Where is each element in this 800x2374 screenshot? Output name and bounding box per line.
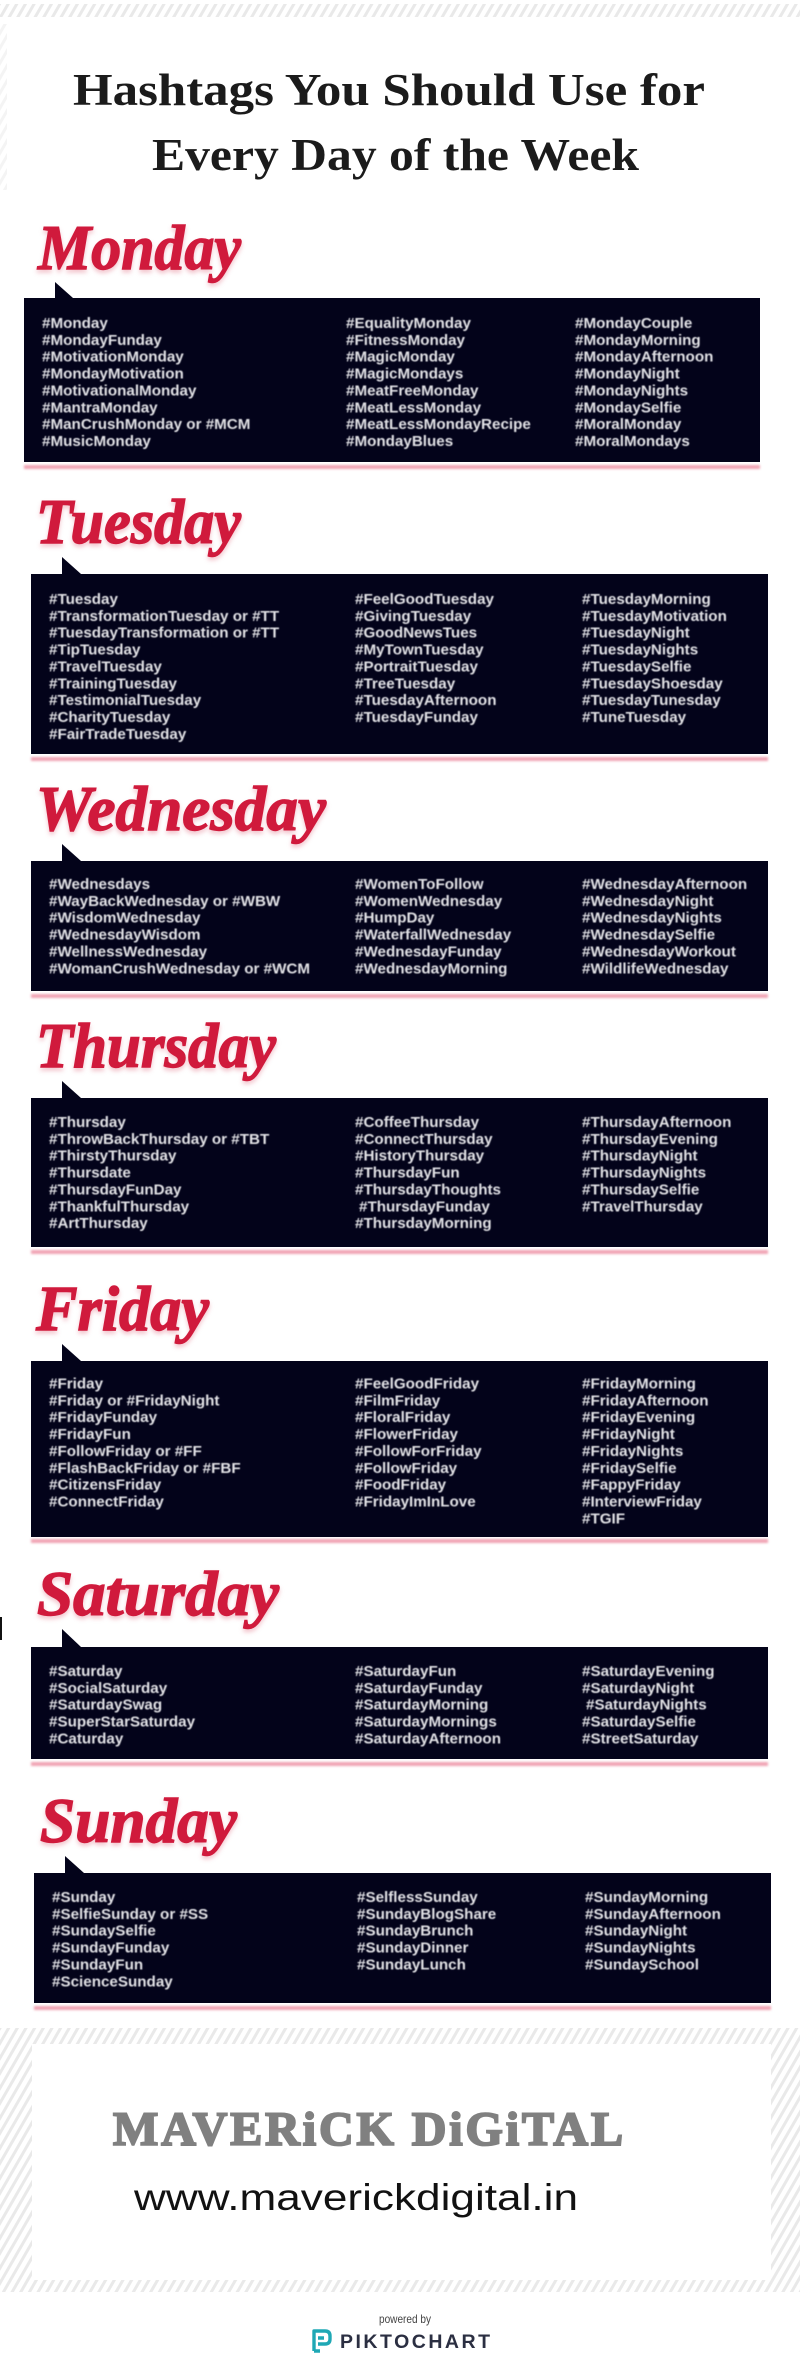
hashtag column 3: Tuesday: #TuneTuesday <box>582 709 687 726</box>
hashtag column 3: Monday: #MoralMonday <box>575 416 682 433</box>
hashtag column 2: Thursday: #ThursdayMorning <box>355 1215 492 1232</box>
hashtag column 3: Monday: #MondaySelfie <box>575 399 681 416</box>
hashtag column 3: Wednesday: #WednesdaySelfie <box>582 927 715 944</box>
hashtag column 1: Thursday: #Thursday <box>49 1114 126 1131</box>
hashtag column 1: Wednesday: #WomanCrushWednesday or #WCM <box>49 960 310 977</box>
hashtag column 2: Saturday: #SaturdayFunday <box>355 1680 483 1697</box>
hashtag column 1: Sunday: #SundaySelfie <box>52 1923 156 1940</box>
hashtag column 1: Thursday: #ArtThursday <box>49 1215 148 1232</box>
pink underline: Wednesday <box>31 994 768 998</box>
speech tail: Thursday <box>62 1081 81 1098</box>
hashtag column 2: Tuesday: #GivingTuesday <box>355 608 472 625</box>
hashtag column 3: Wednesday: #WednesdayNight <box>582 893 713 910</box>
dark box: Wednesday <box>31 861 768 991</box>
hashtag column 2: Monday: #MagicMonday <box>346 349 455 366</box>
hashtag column 3: Monday: #MondayNight <box>575 366 680 383</box>
heading: Friday: Friday <box>35 1273 210 1344</box>
panel: Friday <box>31 1273 768 1543</box>
hashtag column 2: Tuesday: #TuesdayFunday <box>355 709 478 726</box>
hashtag column 2: Friday: #FridayImInLove <box>355 1493 476 1510</box>
hashtag column 3: Friday: #FridayNight <box>582 1426 675 1443</box>
hashtag column 3: Sunday: #SundaySchool <box>585 1956 699 1973</box>
speech tail: Wednesday <box>62 844 81 861</box>
hashtag column 2: Wednesday: #WomenToFollow <box>355 876 484 893</box>
hashtag column 3: Saturday: #SaturdaySelfie <box>582 1714 696 1731</box>
hashtag column 1: Monday: #MusicMonday <box>42 433 151 450</box>
hashtag column 1: Monday: #Monday <box>42 315 108 332</box>
pink underline: Tuesday <box>31 757 768 761</box>
hashtag column 3: Thursday: #ThursdaySelfie <box>582 1181 699 1198</box>
hashtag column 1: Tuesday: #TestimonialTuesday <box>49 692 202 709</box>
hashtag column 3: Saturday: #StreetSaturday <box>582 1730 699 1747</box>
hashtag column 2: Monday: #MagicMondays <box>346 366 463 383</box>
hashtag column 2: Monday: #MeatFreeMonday <box>346 382 479 399</box>
hashtag column 2: Tuesday: #MyTownTuesday <box>355 642 484 659</box>
hashtag column 1: Monday: #MondayMotivation <box>42 366 184 383</box>
heading: Wednesday: Wednesday <box>36 773 327 844</box>
hashtag column 3: Wednesday: #WednesdayAfternoon <box>582 876 747 893</box>
hashtag column 1: Tuesday: #TipTuesday <box>49 642 141 659</box>
heading: Thursday: Thursday <box>36 1010 277 1081</box>
hashtag column 3: Thursday: #ThursdayAfternoon <box>582 1114 731 1131</box>
hashtag column 2: Thursday: #HistoryThursday <box>355 1148 485 1165</box>
hashtag column 2: Friday: #FeelGoodFriday <box>355 1376 480 1392</box>
panel: Saturday <box>31 1558 768 1766</box>
dark box: Monday <box>24 298 760 462</box>
hashtag column 3: Tuesday: #TuesdayNight <box>582 625 690 642</box>
hashtag column 3: Saturday: #SaturdayNight <box>582 1680 694 1697</box>
hashtag column 2: Wednesday: #WaterfallWednesday <box>355 927 512 944</box>
hashtag column 3: Friday: #FridayEvening <box>582 1409 695 1426</box>
dark box: Sunday <box>34 1873 771 2003</box>
hashtag column 1: Saturday: #SuperStarSaturday <box>49 1714 196 1731</box>
hashtag column 3: Tuesday: #TuesdayNights <box>582 642 698 659</box>
hashtag column 2: Monday: #MondayBlues <box>346 433 453 450</box>
hashtag column 1: Friday: #FlashBackFriday or #FBF <box>49 1460 241 1477</box>
powered by label: powered by <box>379 2312 431 2326</box>
hashtag column 1: Friday: #FridayFun <box>49 1426 131 1443</box>
hashtag column 3: Friday: #FridayAfternoon <box>582 1392 709 1409</box>
hashtag column 2: Wednesday: #WednesdayFunday <box>355 943 502 960</box>
hashtag column 3: Tuesday: #TuesdayMorning <box>582 591 711 608</box>
hashtag column 1: Thursday: #Thursdate <box>49 1165 131 1182</box>
hashtag column 2: Wednesday: #HumpDay <box>355 910 435 927</box>
hashtag column 3: Tuesday: #TuesdayMotivation <box>582 608 727 625</box>
hashtag column 1: Thursday: #ThrowBackThursday or #TBT <box>49 1131 270 1148</box>
panel: Monday <box>24 212 760 469</box>
hashtag column 3: Wednesday: #WildlifeWednesday <box>582 960 729 977</box>
dark box: Saturday <box>31 1647 768 1759</box>
hashtag column 1: Tuesday: #TuesdayTransformation or #TT <box>49 625 280 642</box>
hashtag column 1: Thursday: #ThirstyThursday <box>49 1148 177 1165</box>
hashtag column 3: Saturday: #SaturdayEvening <box>582 1663 715 1680</box>
dark box: Tuesday <box>31 574 768 754</box>
piktochart wordmark: PIKTOCHART <box>340 2331 490 2353</box>
hashtag column 1: Sunday: #SundayFun <box>52 1956 143 1973</box>
top hatched band <box>0 4 800 17</box>
hashtag column 3: Friday: #TGIF <box>582 1510 625 1527</box>
hashtag column 1: Sunday: #SelfieSunday or #SS <box>52 1906 208 1923</box>
hashtag column 3: Friday: #FridaySelfie <box>582 1460 677 1477</box>
heading: Sunday: Sunday <box>40 1785 238 1856</box>
hashtag column 3: Monday: #MondayCouple <box>575 315 692 332</box>
hashtag column 1: Tuesday: #CharityTuesday <box>49 709 171 726</box>
pink underline: Monday <box>24 465 760 469</box>
hashtag column 1: Sunday: #ScienceSunday <box>52 1973 173 1990</box>
hashtag column 2: Saturday: #SaturdayAfternoon <box>355 1730 501 1747</box>
heading: Saturday: Saturday <box>37 1558 280 1629</box>
hashtag column 2: Friday: #FlowerFriday <box>355 1426 459 1443</box>
hashtag column 3: Sunday: #SundayNight <box>585 1923 687 1940</box>
hashtag column 2: Wednesday: #WednesdayMorning <box>355 960 507 977</box>
hashtag column 2: Thursday: #ThursdayFun <box>355 1165 460 1182</box>
icon: piktochart logo <box>314 2331 330 2351</box>
hashtag column 2: Thursday: #ThursdayFunday <box>359 1198 490 1215</box>
hashtag column 2: Saturday: #SaturdayMornings <box>355 1714 497 1731</box>
hashtag column 2: Thursday: #ThursdayThoughts <box>355 1181 501 1198</box>
hashtag column 3: Tuesday: #TuesdayTunesday <box>582 692 721 709</box>
hashtag column 2: Sunday: #SundayBlogShare <box>357 1906 496 1923</box>
hashtag column 3: Friday: #FridayNights <box>582 1443 683 1460</box>
hashtag column 3: Wednesday: #WednesdayNights <box>582 910 722 927</box>
hashtag column 3: Thursday: #ThursdayEvening <box>582 1131 718 1148</box>
hashtag column 2: Tuesday: #TreeTuesday <box>355 675 456 692</box>
hashtag column 1: Wednesday: #Wednesdays <box>49 876 150 893</box>
hashtag column 3: Monday: #MoralMondays <box>575 433 690 450</box>
panel: Wednesday <box>31 773 768 998</box>
title <box>73 65 705 180</box>
hashtag column 3: Sunday: #SundayNights <box>585 1940 696 1957</box>
hashtag column 2: Wednesday: #WomenWednesday <box>355 893 503 910</box>
hashtag column 2: Tuesday: #TuesdayAfternoon <box>355 692 496 709</box>
hashtag column 1: Wednesday: #WednesdayWisdom <box>49 927 200 944</box>
hashtag column 1: Thursday: #ThursdayFunDay <box>49 1181 182 1198</box>
hashtag column 1: Sunday: #SundayFunday <box>52 1940 170 1957</box>
speech tail: Friday <box>62 1344 81 1361</box>
panel: Tuesday <box>31 486 768 761</box>
title: Every Day of the Week <box>152 130 639 180</box>
heading: Monday: Monday <box>37 212 242 283</box>
hashtag column 2: Monday: #MeatLessMondayRecipe <box>346 416 531 433</box>
inner white box <box>32 2044 771 2280</box>
hashtag column 3: Thursday: #ThursdayNights <box>582 1165 706 1182</box>
hashtag column 1: Wednesday: #WisdomWednesday <box>49 910 201 927</box>
hatched frame <box>0 2028 800 2292</box>
hashtag column 3: Sunday: #SundayMorning <box>585 1889 708 1906</box>
hashtag column 1: Friday: #ConnectFriday <box>49 1493 164 1510</box>
hashtag column 2: Tuesday: #FeelGoodTuesday <box>355 591 495 608</box>
hashtag column 2: Friday: #FollowForFriday <box>355 1443 482 1460</box>
hashtag column 3: Monday: #MondayAfternoon <box>575 349 713 366</box>
heading: Tuesday: Tuesday <box>36 486 242 557</box>
hashtag column 3: Tuesday: #TuesdayShoesday <box>582 675 723 692</box>
hashtag column 2: Monday: #EqualityMonday <box>346 315 471 332</box>
hashtag column 1: Tuesday: #TrainingTuesday <box>49 675 178 692</box>
hashtag column 3: Tuesday: #TuesdaySelfie <box>582 658 691 675</box>
hashtag column 3: Friday: #InterviewFriday <box>582 1493 702 1510</box>
hashtag column 3: Sunday: #SundayAfternoon <box>585 1906 721 1923</box>
hashtag column 3: Friday: #FappyFriday <box>582 1477 681 1494</box>
hashtag column 1: Thursday: #ThankfulThursday <box>49 1198 190 1215</box>
website url: www.maverickdigital.in <box>133 2177 578 2218</box>
speech tail: Monday <box>55 282 73 298</box>
hashtag column 3: Saturday: #SaturdayNights <box>586 1697 707 1714</box>
panel: footer brand <box>0 2028 800 2292</box>
panel: Thursday <box>31 1010 768 1254</box>
hashtag column 1: Wednesday: #WayBackWednesday or #WBW <box>49 893 281 910</box>
speech tail: Tuesday <box>62 557 81 574</box>
hashtag column 1: Monday: #MantraMonday <box>42 399 158 416</box>
hashtag column 1: Friday: #CitizensFriday <box>49 1477 162 1494</box>
hashtag column 1: Monday: #MotivationMonday <box>42 349 184 366</box>
hashtag column 1: Monday: #MotivationalMonday <box>42 382 197 399</box>
hashtag column 2: Friday: #FloralFriday <box>355 1409 451 1426</box>
pink underline: Thursday <box>31 1250 768 1254</box>
hashtag column 1: Tuesday: #TravelTuesday <box>49 658 162 675</box>
hashtag column 1: Friday: #Friday <box>49 1376 104 1392</box>
hashtag column 1: Sunday: #Sunday <box>52 1889 116 1906</box>
pink underline: Friday <box>31 1539 768 1543</box>
dark box: Thursday <box>31 1098 768 1247</box>
hashtag column 3: Thursday: #TravelThursday <box>582 1198 703 1215</box>
hashtag column 2: Friday: #FilmFriday <box>355 1392 441 1409</box>
hashtag column 2: Monday: #FitnessMonday <box>346 332 466 349</box>
hashtag column 1: Friday: #Friday or #FridayNight <box>49 1392 219 1409</box>
left edge black mark <box>0 1617 2 1640</box>
hashtag column 1: Monday: #MondayFunday <box>42 332 162 349</box>
hashtag column 2: Friday: #FoodFriday <box>355 1477 447 1494</box>
hashtag column 3: Wednesday: #WednesdayWorkout <box>582 943 736 960</box>
hashtag column 2: Sunday: #SundayDinner <box>357 1940 468 1957</box>
hashtag column 3: Thursday: #ThursdayNight <box>582 1148 698 1165</box>
pink underline: Sunday <box>34 2006 771 2010</box>
hashtag column 2: Monday: #MeatLessMonday <box>346 399 482 416</box>
hashtag column 1: Saturday: #SaturdaySwag <box>49 1697 162 1714</box>
hashtag column 1: Saturday: #Caturday <box>49 1730 124 1747</box>
panel: Sunday <box>34 1785 771 2010</box>
hashtag column 1: Tuesday: #Tuesday <box>49 591 118 608</box>
hashtag column 1: Friday: #FridayFunday <box>49 1409 158 1426</box>
hashtag column 1: Saturday: #SocialSaturday <box>49 1680 168 1697</box>
hashtag column 2: Thursday: #CoffeeThursday <box>355 1114 480 1131</box>
hashtag column 1: Tuesday: #FairTradeTuesday <box>49 726 187 743</box>
speech tail: Sunday <box>65 1856 84 1873</box>
hashtag column 2: Friday: #FollowFriday <box>355 1460 458 1477</box>
hashtag column 3: Monday: #MondayNights <box>575 382 688 399</box>
brand name: MAVERiCK DiGiTAL <box>113 2103 623 2156</box>
hashtag column 2: Sunday: #SelflessSunday <box>357 1889 478 1906</box>
hashtag column 2: Tuesday: #GoodNewsTues <box>355 625 477 642</box>
hashtag column 3: Friday: #FridayMorning <box>582 1376 696 1392</box>
hashtag column 1: Saturday: #Saturday <box>49 1663 123 1680</box>
speech tail: Saturday <box>62 1629 81 1647</box>
pink underline: Saturday <box>31 1762 768 1766</box>
hashtag column 1: Monday: #ManCrushMonday or #MCM <box>42 416 250 433</box>
hashtag column 1: Tuesday: #TransformationTuesday or #TT <box>49 608 280 625</box>
hashtag column 2: Thursday: #ConnectThursday <box>355 1131 493 1148</box>
hashtag column 2: Sunday: #SundayLunch <box>357 1956 466 1973</box>
hashtag column 1: Friday: #FollowFriday or #FF <box>49 1443 202 1460</box>
hashtag column 3: Monday: #MondayMorning <box>575 332 701 349</box>
hashtag column 2: Saturday: #SaturdayMorning <box>355 1697 488 1714</box>
hashtag column 1: Wednesday: #WellnessWednesday <box>49 943 208 960</box>
dark box: Friday <box>31 1361 768 1537</box>
left hatched edge <box>0 24 7 190</box>
hashtag column 2: Saturday: #SaturdayFun <box>355 1663 456 1680</box>
title: Hashtags You Should Use for <box>73 65 705 115</box>
hashtag column 2: Tuesday: #PortraitTuesday <box>355 658 478 675</box>
hashtag column 2: Sunday: #SundayBrunch <box>357 1923 473 1940</box>
